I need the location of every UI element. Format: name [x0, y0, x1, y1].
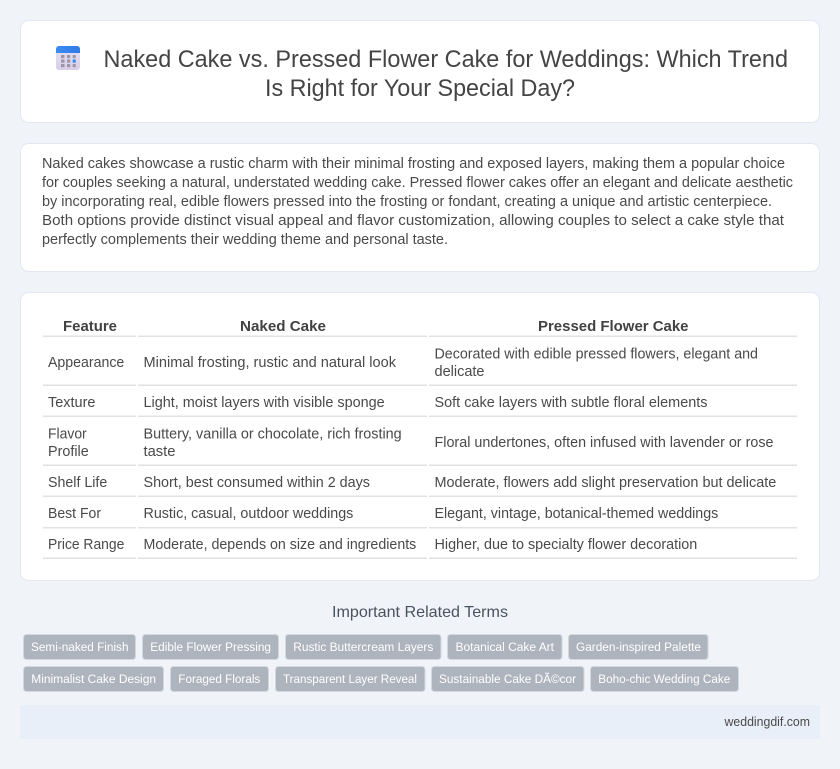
title: Naked Cake vs. Pressed Flower Cake for Weddings: Which Trend: [104, 46, 788, 73]
row: appearance: delicate: [434, 364, 484, 380]
row: best for: Best For: [48, 506, 101, 522]
tag list: related terms: Garden-inspired Palette: [576, 640, 701, 654]
row: appearance: Appearance: [48, 355, 124, 371]
tag list: related terms: Botanical Cake Art: [456, 640, 555, 654]
row: price range: Moderate, depends on size and ingredients: [144, 537, 416, 553]
tag list: related terms: Rustic Buttercream Layers: [293, 640, 433, 654]
tag list: related terms: Boho-chic Wedding Cake: [598, 672, 731, 686]
text block: introduction paragraph: perfectly complements their wedding theme and personal taste.: [42, 232, 448, 248]
panel: title header: [20, 20, 820, 122]
tag list: related terms: Sustainable Cake DÃ©cor: [439, 672, 576, 686]
tag list: related terms: Semi-naked Finish: [31, 640, 128, 654]
panel: comparison table: [20, 292, 820, 580]
title: Is Right for Your Special Day?: [265, 75, 575, 102]
table header row: [63, 318, 688, 335]
table header row: Naked Cake: [240, 318, 326, 335]
tag list: related terms: Minimalist Cake Design: [31, 672, 156, 686]
row: texture: Texture: [48, 395, 96, 411]
footer bar: weddingdif.com: [724, 714, 810, 729]
row: best for: [48, 506, 718, 522]
table header row: Feature: [63, 318, 117, 335]
row: flavor profile: Profile: [48, 444, 89, 460]
row: flavor profile: Floral undertones, often infused with lavender or rose: [434, 435, 774, 451]
tag list: related terms: [24, 634, 738, 692]
row: shelf life: Moderate, flowers add slight preservation but delicate: [434, 475, 776, 491]
tag list: related terms: Foraged Florals: [178, 672, 260, 686]
row: shelf life: [48, 475, 776, 491]
text block: introduction paragraph: for couples seeking a natural, understated wedding cake. Pressed flower cakes offer an elegant and delicate aesthetic: [42, 175, 793, 191]
row: texture: Soft cake layers with subtle floral elements: [434, 395, 708, 411]
row: best for: Elegant, vintage, botanical-themed weddings: [434, 506, 718, 522]
text block: introduction paragraph: [42, 156, 793, 248]
panel: introduction: [20, 144, 820, 272]
row: price range: Price Range: [48, 537, 124, 553]
row: price range: Higher, due to specialty flower decoration: [434, 537, 697, 553]
tag list: related terms: Edible Flower Pressing: [150, 640, 271, 654]
row: flavor profile: taste: [144, 444, 176, 460]
row: texture: [48, 395, 708, 411]
icon: calendar: [56, 46, 80, 70]
row: appearance: Decorated with edible pressed flowers, elegant and: [434, 346, 758, 362]
title: [104, 46, 788, 102]
text block: introduction paragraph: Both options provide distinct visual appeal and flavor customization, allowing couples to select a cake style that: [42, 213, 784, 229]
row: appearance: Minimal frosting, rustic and natural look: [144, 355, 397, 371]
footer bar: [20, 705, 820, 739]
row: texture: Light, moist layers with visible sponge: [144, 395, 385, 411]
row: flavor profile: Flavor: [48, 426, 87, 442]
row: best for: Rustic, casual, outdoor weddings: [144, 506, 353, 522]
text block: introduction paragraph: Naked cakes showcase a rustic charm with their minimal frosting and exposed layers, making them a popular choice: [42, 156, 785, 172]
heading: important related terms: Important Related Terms: [332, 604, 508, 621]
text block: introduction paragraph: by incorporating real, edible flowers pressed into the frosting or fondant, creating a unique and artistic centerpiece.: [42, 194, 772, 210]
row: price range: [48, 537, 697, 553]
tag list: related terms: Transparent Layer Reveal: [283, 672, 417, 686]
row: flavor profile: [48, 426, 774, 460]
table header row: Pressed Flower Cake: [538, 318, 688, 335]
row: appearance: [48, 346, 758, 380]
row: shelf life: Shelf Life: [48, 475, 107, 491]
row: flavor profile: Buttery, vanilla or chocolate, rich frosting: [144, 426, 402, 442]
row: shelf life: Short, best consumed within 2 days: [144, 475, 370, 491]
